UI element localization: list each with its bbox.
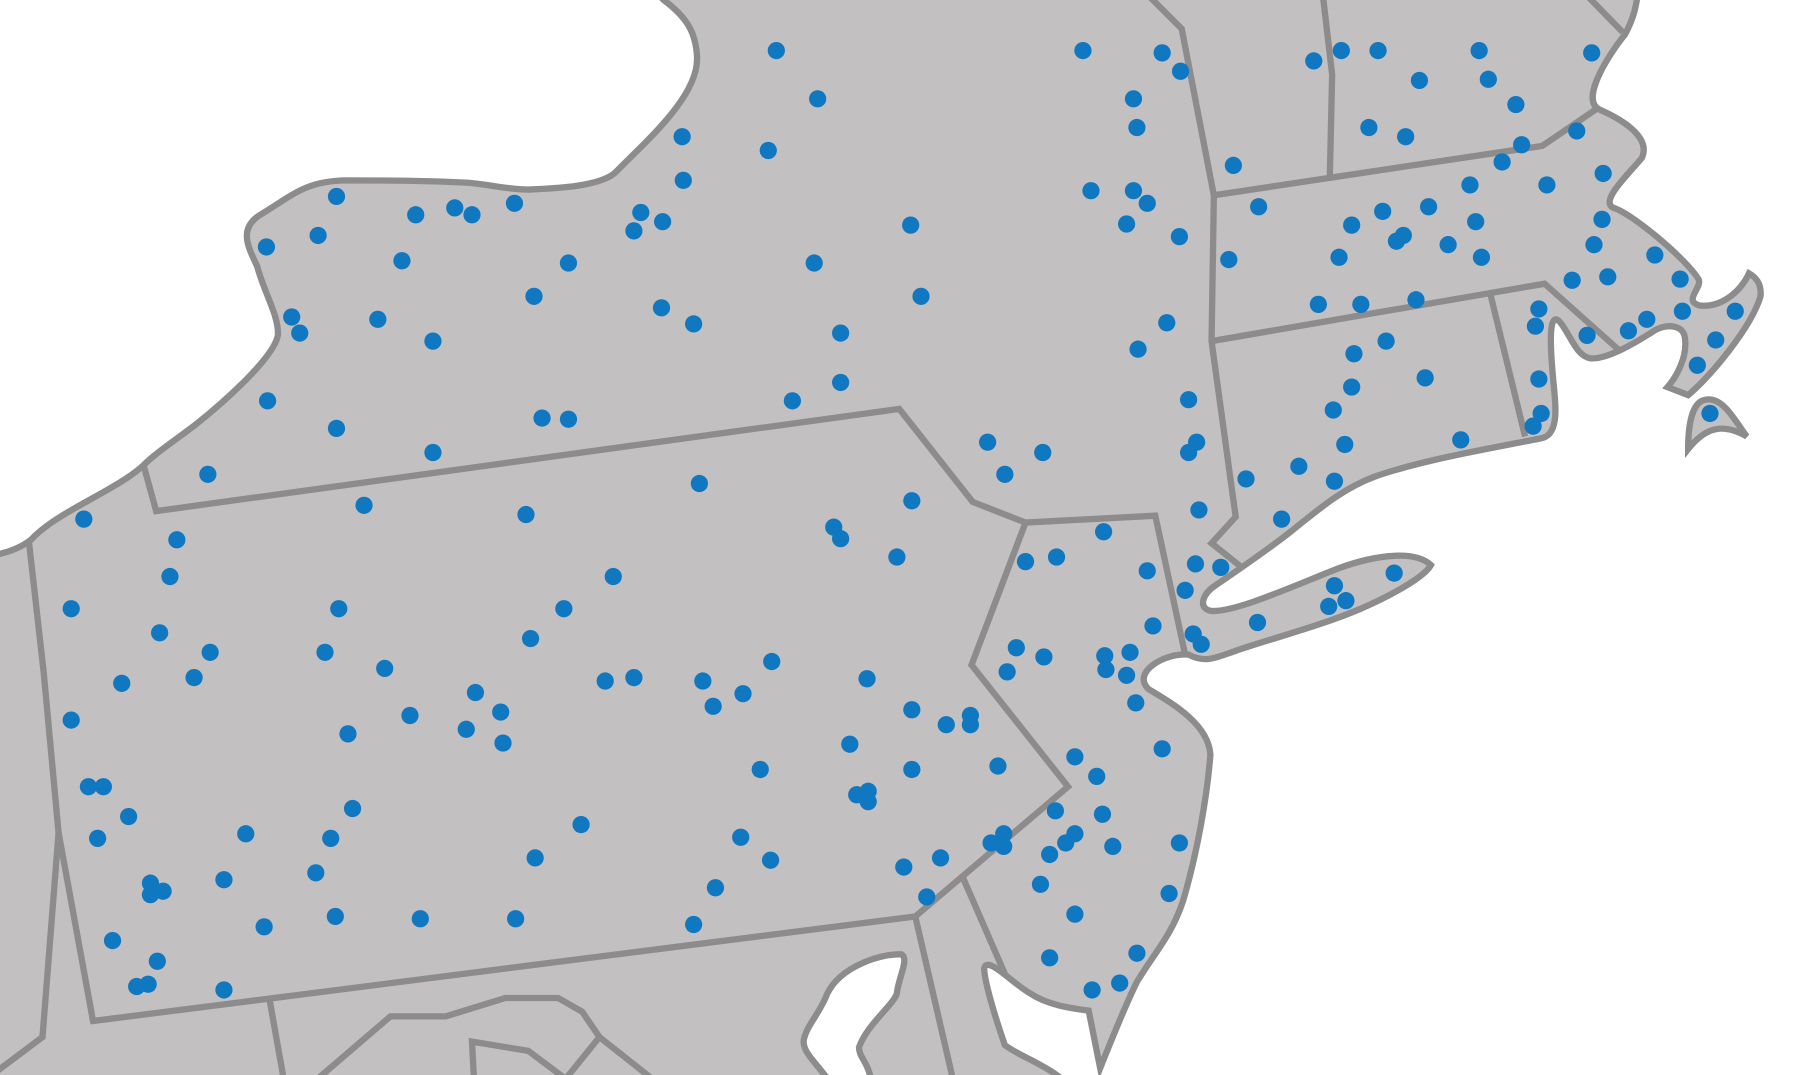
island <box>1688 399 1747 449</box>
